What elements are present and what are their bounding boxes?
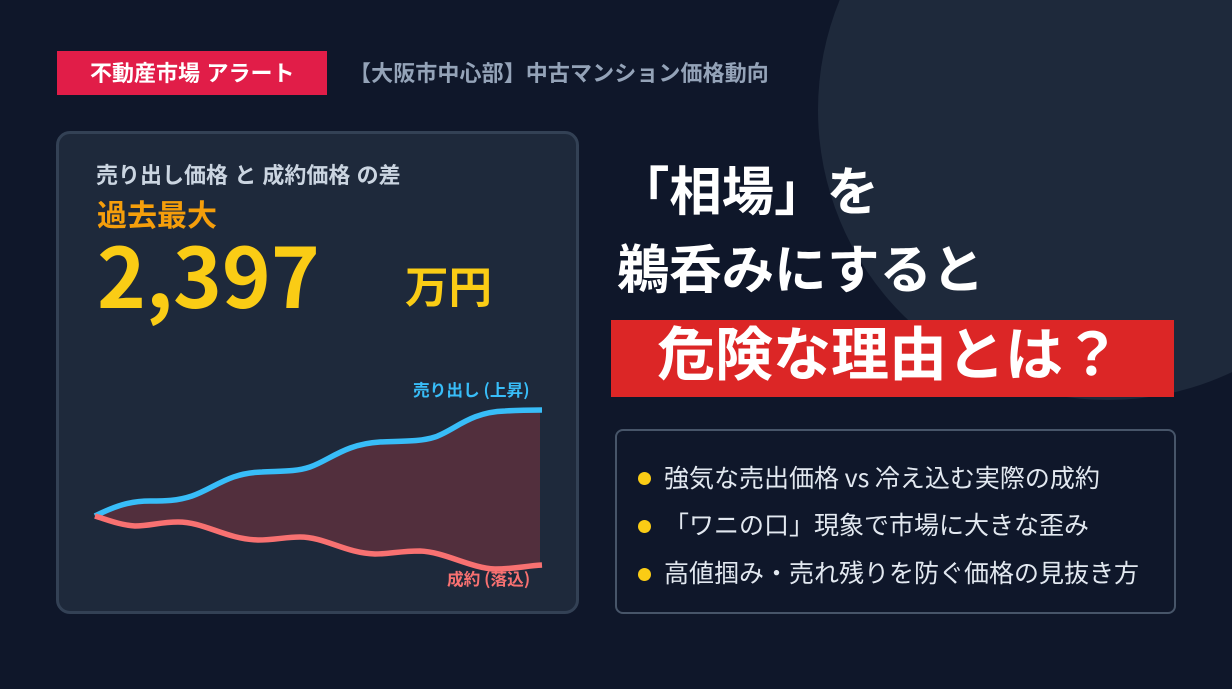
subtitle: 【大阪市中心部】中古マンション価格動向 [349, 56, 769, 88]
background circle [818, 0, 1232, 400]
contract price line [95, 516, 542, 569]
record label: 過去最大 [97, 191, 217, 235]
bullet 1 marker [638, 472, 651, 485]
gap area [95, 410, 540, 569]
headline line 2: 鵜呑みにすると [617, 228, 984, 304]
alert tag: 不動産市場 アラート [90, 56, 294, 88]
headline highlight band [611, 320, 1174, 397]
bullet 2 marker [638, 520, 651, 533]
unit: 万円 [405, 253, 492, 316]
selling price line [95, 410, 542, 516]
bullet 3 text: 高値掴み・売れ残りを防ぐ価格の見抜き方 [664, 554, 1139, 590]
alert tag [57, 51, 327, 95]
chart label: selling price: 売り出し (上昇) [413, 377, 530, 401]
bullet 2 text: 「ワニの口」現象で市場に大きな歪み [664, 506, 1089, 542]
big number: 2,397 [97, 212, 320, 332]
panel: price gap [56, 131, 579, 614]
bullet 3 marker [638, 568, 651, 581]
bullet 1 text: 強気な売出価格 vs 冷え込む実際の成約 [664, 459, 1100, 495]
headline highlight band: 危険な理由とは？ [657, 308, 1121, 392]
headline line 1: 「相場」を [617, 150, 879, 226]
panel: key points [615, 429, 1176, 614]
panel caption: 売り出し価格 と 成約価格 の差 [96, 158, 401, 190]
chart label: contract price: 成約 (落込) [447, 566, 530, 590]
